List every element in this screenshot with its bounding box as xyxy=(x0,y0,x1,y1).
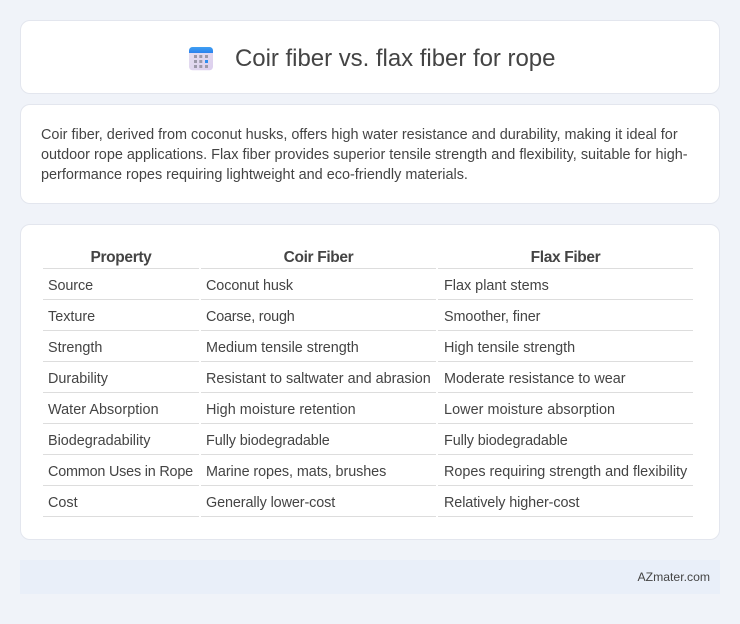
row: Water Absorption: High moisture retention xyxy=(206,402,356,418)
row: Biodegradability: Fully biodegradable xyxy=(206,433,330,449)
row: Durability: Moderate resistance to wear xyxy=(444,371,626,387)
row: Strength: Strength xyxy=(48,340,102,356)
table header: Property xyxy=(91,249,151,266)
icon: calendar xyxy=(189,47,213,70)
panel: summary xyxy=(20,104,720,204)
row: Durability: Resistant to saltwater and abrasion xyxy=(206,371,431,387)
row: Texture: Coarse, rough xyxy=(206,309,295,325)
row: Water Absorption: Lower moisture absorption xyxy=(444,402,615,418)
row: Water Absorption: Water Absorption xyxy=(48,402,159,418)
row: Cost: Relatively higher-cost xyxy=(444,495,579,511)
footer source text: AZmater.com xyxy=(638,570,710,584)
row: Durability: Durability xyxy=(48,371,108,387)
row: Water Absorption xyxy=(48,402,615,418)
summary text xyxy=(41,127,688,183)
row: Texture: Smoother, finer xyxy=(444,309,540,325)
title: Coir fiber vs. flax fiber for rope xyxy=(235,45,555,72)
panel: comparison table xyxy=(20,224,720,540)
row: Source xyxy=(48,278,549,294)
row: Strength: Medium tensile strength xyxy=(206,340,359,356)
row: Cost: Cost xyxy=(48,495,78,511)
row: Durability xyxy=(48,371,626,387)
summary text: outdoor rope applications. Flax fiber provides superior tensile strength and flexibility, suitable for high- xyxy=(41,147,688,163)
row: Source: Source xyxy=(48,278,93,294)
row: Texture: Texture xyxy=(48,309,95,325)
row: Common Uses in Rope: Ropes requiring strength and flexibility xyxy=(444,464,687,480)
row: Source: Coconut husk xyxy=(206,278,293,294)
row: Biodegradability: Fully biodegradable xyxy=(444,433,568,449)
summary text: performance ropes requiring lightweight and eco-friendly materials. xyxy=(41,167,468,183)
row: Biodegradability xyxy=(48,433,568,449)
row: Strength: High tensile strength xyxy=(444,340,575,356)
row: Biodegradability: Biodegradability xyxy=(48,433,150,449)
table header: Coir Fiber xyxy=(284,249,353,266)
footer bar xyxy=(20,560,720,594)
row: Common Uses in Rope: Marine ropes, mats, brushes xyxy=(206,464,386,480)
table header xyxy=(91,249,600,266)
row: Cost xyxy=(48,495,580,511)
row: Texture xyxy=(48,309,540,325)
row: Source: Flax plant stems xyxy=(444,278,549,294)
row: Strength xyxy=(48,340,575,356)
panel: title card xyxy=(20,20,720,94)
table header: Flax Fiber xyxy=(531,249,600,266)
row: Common Uses in Rope xyxy=(48,464,688,480)
row: Common Uses in Rope: Common Uses in Rope xyxy=(48,464,193,480)
summary text: Coir fiber, derived from coconut husks, offers high water resistance and durability, making it ideal for xyxy=(41,127,678,143)
row: Cost: Generally lower-cost xyxy=(206,495,335,511)
